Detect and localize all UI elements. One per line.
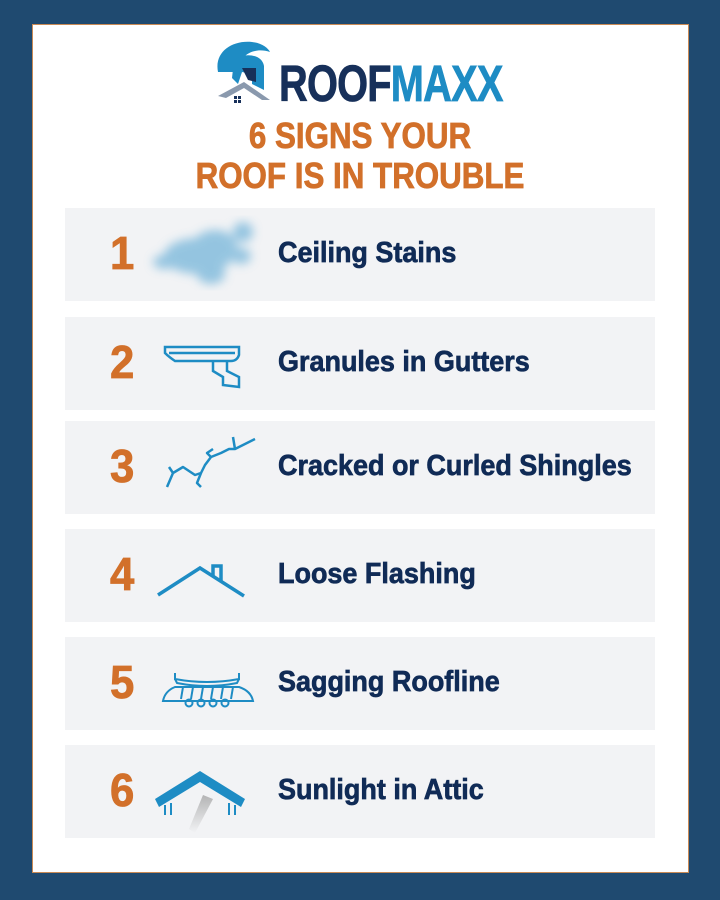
item 3: cracked shingles: 3 [110, 440, 134, 492]
icon: crack [166, 436, 256, 488]
item 1: ceiling stains [65, 208, 655, 301]
item 2: gutters [65, 317, 655, 410]
item 4: loose flashing: 4 [110, 548, 134, 600]
title [196, 115, 524, 196]
icon: gutter [164, 346, 240, 388]
label: Sunlight in Attic [278, 774, 484, 806]
item 2: gutters: 2 [110, 336, 134, 388]
label: Ceiling Stains [278, 237, 456, 269]
icon: spartan helmet [217, 42, 270, 103]
item 1: ceiling stains: 1 [110, 227, 134, 279]
title: ROOF IS IN TROUBLE [196, 155, 524, 196]
logo [217, 42, 504, 112]
icon: roof with light ray [155, 771, 245, 828]
icon: roof with chimney [157, 564, 245, 598]
title: 6 SIGNS YOUR [249, 115, 471, 156]
item 4: loose flashing [65, 529, 655, 622]
icon: tiled roof [162, 673, 254, 708]
label: Cracked or Curled Shingles [278, 450, 632, 482]
icon: stain [148, 216, 258, 290]
item 3: cracked shingles [65, 421, 655, 514]
label: Loose Flashing [278, 558, 476, 590]
item 5: sagging roofline [65, 637, 655, 730]
item 6: sunlight in attic [65, 745, 655, 838]
logo wordmark: ROOFMAXX [279, 55, 503, 112]
item 5: sagging roofline: 5 [110, 656, 134, 708]
label: Granules in Gutters [278, 346, 530, 378]
item 6: sunlight in attic: 6 [110, 764, 134, 816]
label: Sagging Roofline [278, 666, 500, 698]
